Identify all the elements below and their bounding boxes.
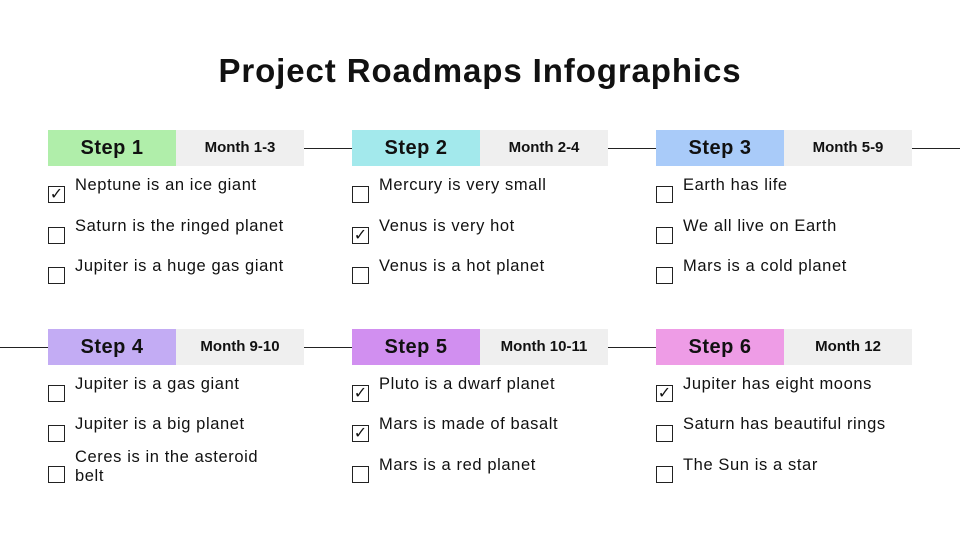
header: step 5: Month 10-11 — [501, 338, 587, 355]
checklist item: Pluto is a dwarf planet — [379, 375, 555, 393]
checklist item: Venus is very hot — [379, 217, 515, 235]
header: step 5: Step 5 — [384, 336, 448, 358]
checklist item: Jupiter is a big planet — [75, 415, 245, 433]
checklist item — [48, 375, 240, 402]
panel: step 4 — [48, 329, 304, 485]
checklist item: Jupiter has eight moons — [683, 375, 872, 393]
header: step 3: Month 5-9 — [813, 139, 883, 156]
checklist item: Mars is a cold planet — [683, 257, 847, 275]
header: step 5 — [352, 329, 608, 365]
checklist item — [48, 257, 284, 284]
checklist item — [48, 176, 257, 203]
checklist item: ✓ — [354, 385, 367, 402]
checklist item: Saturn has beautiful rings — [683, 415, 886, 433]
panel: step 1 — [48, 130, 304, 284]
checklist item — [656, 217, 837, 244]
checklist item: Jupiter is a gas giant — [75, 375, 240, 393]
checklist item — [656, 415, 886, 442]
header: step 4 — [48, 329, 304, 365]
checklist item — [352, 456, 536, 483]
checklist item: Saturn is the ringed planet — [75, 217, 284, 235]
checklist item: Mars is a red planet — [379, 456, 536, 474]
header: step 3: Step 3 — [688, 137, 752, 159]
header: step 3 — [656, 130, 912, 166]
checklist item: We all live on Earth — [683, 217, 837, 235]
header: step 1 — [48, 130, 304, 166]
panel: step 6 — [656, 329, 912, 483]
panel: step 2 — [352, 130, 608, 284]
header: step 2: Step 2 — [384, 137, 448, 159]
header: step 6 — [656, 329, 912, 365]
checklist item: Jupiter is a huge gas giant — [75, 257, 284, 275]
checklist item — [352, 415, 558, 442]
checklist item: ✓ — [354, 227, 367, 244]
panel: step 5 — [352, 329, 608, 483]
checklist item — [656, 456, 818, 483]
checklist item — [352, 217, 515, 244]
checklist item — [48, 217, 284, 244]
checklist item — [352, 375, 555, 402]
title: Project Roadmaps Infographics — [218, 52, 742, 89]
checklist item — [656, 257, 847, 284]
checklist item: Venus is a hot planet — [379, 257, 545, 275]
header: step 2 — [352, 130, 608, 166]
checklist item: ✓ — [354, 425, 367, 442]
panel: step 3 — [656, 130, 912, 284]
checklist item: Mercury is very small — [379, 176, 547, 194]
checklist item: ✓ — [658, 385, 671, 402]
checklist item: Ceres is in the asteroid belt — [75, 448, 258, 485]
checklist item: ✓ — [50, 186, 63, 203]
header: step 2: Month 2-4 — [509, 139, 579, 156]
checklist item: The Sun is a star — [683, 456, 818, 474]
checklist item — [656, 375, 872, 402]
header: step 4: Step 4 — [80, 336, 144, 358]
checklist item — [352, 176, 547, 203]
header: step 4: Month 9-10 — [200, 338, 280, 355]
header: step 6: Step 6 — [688, 336, 752, 358]
checklist item: Mars is made of basalt — [379, 415, 558, 433]
checklist item — [352, 257, 545, 284]
checklist item: Earth has life — [683, 176, 788, 194]
header: step 1: Step 1 — [80, 137, 144, 159]
checklist item — [48, 415, 245, 442]
header: step 6: Month 12 — [815, 338, 881, 355]
header: step 1: Month 1-3 — [205, 139, 275, 156]
checklist item: Neptune is an ice giant — [75, 176, 257, 194]
checklist item — [656, 176, 788, 203]
